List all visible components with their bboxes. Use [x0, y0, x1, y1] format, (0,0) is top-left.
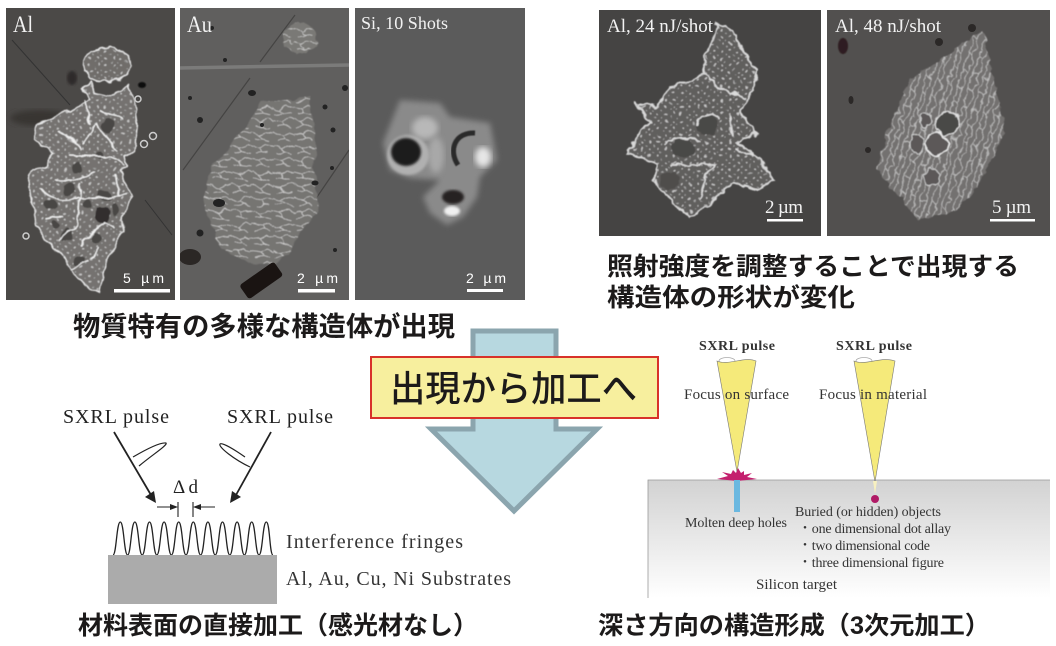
caption: top left: 物質特有の多様な構造体が出現 — [73, 311, 455, 342]
caption: top right: 照射強度を調整することで出現する — [607, 253, 1019, 281]
beam: surface focus — [717, 358, 756, 472]
label: fringes: Interference fringes — [286, 531, 463, 553]
scale bar — [990, 200, 1035, 222]
label: Al, 48 nJ/shot — [835, 16, 942, 37]
label: SXRL pulse right: SXRL pulse — [227, 406, 333, 428]
scale bar — [114, 274, 170, 292]
labels: Focus on surface — [684, 387, 789, 403]
scale bar: 2 µm — [765, 197, 803, 218]
scale bar — [298, 274, 338, 292]
diagram: interference processing — [63, 406, 511, 604]
buried dot — [871, 495, 879, 503]
scale bar — [466, 274, 506, 292]
labels: SXRL pulse — [699, 339, 775, 354]
top crater blob — [84, 48, 130, 82]
labels: Focus in material — [819, 387, 927, 403]
main melted area — [28, 84, 138, 292]
caption: bottom right: 深さ方向の構造形成（3次元加工） — [598, 612, 990, 640]
label: Au — [187, 12, 212, 37]
delta d dimension — [157, 477, 215, 517]
caption: top right: 構造体の形状が変化 — [607, 283, 855, 312]
label: Si, 10 Shots — [361, 13, 448, 33]
molten hole — [734, 480, 740, 512]
beam: in-material focus — [854, 358, 895, 494]
diagram: focus depth processing — [648, 339, 1050, 598]
labels: ・two dimensional code — [798, 539, 930, 554]
callout: from emergence to processing: 出現から加工へ — [390, 368, 637, 409]
scale bar: 5 µm — [992, 197, 1031, 218]
crater bottom — [442, 190, 464, 204]
label: Al, 24 nJ/shot — [607, 16, 714, 37]
crater right — [453, 133, 475, 165]
big down arrow — [431, 331, 597, 511]
arrow: left pulse — [114, 432, 166, 503]
interference fringes — [113, 522, 273, 555]
labels: Silicon target — [756, 577, 838, 593]
surface burst — [717, 468, 757, 481]
label: Al — [13, 12, 33, 37]
arrow: right pulse — [220, 432, 271, 503]
caption: bottom left: 材料表面の直接加工（感光材なし） — [78, 612, 478, 640]
label: substrates: Al, Au, Cu, Ni Substrates — [286, 568, 511, 590]
photo: Al structure — [6, 8, 175, 300]
silicon target — [648, 480, 1050, 598]
scale bar: 2 µm — [297, 270, 338, 286]
labels: Buried (or hidden) objects — [795, 505, 941, 520]
photo: Al 24 nJ/shot — [599, 10, 821, 236]
photo: Al 48 nJ/shot — [827, 10, 1050, 236]
crater left — [387, 135, 429, 175]
delta d dimension: Δ d — [173, 477, 198, 498]
photo: Au structure — [179, 8, 349, 300]
dark debris — [239, 261, 283, 299]
main area — [203, 97, 320, 267]
callout: from emergence to processing — [371, 357, 658, 418]
small upper structure — [283, 23, 317, 53]
caption: top right — [607, 253, 1019, 312]
label: SXRL pulse left: SXRL pulse — [63, 406, 169, 428]
labels: Molten deep holes — [685, 516, 787, 531]
labels: SXRL pulse — [836, 339, 912, 354]
labels: ・one dimensional dot allay — [798, 522, 951, 537]
labels — [684, 339, 951, 593]
scale bar: 2 µm — [466, 270, 506, 286]
scale bar: 5 µm — [123, 270, 164, 286]
labels: ・three dimensional figure — [798, 556, 944, 571]
photo: Si 10 shots — [355, 8, 525, 300]
substrate — [108, 555, 277, 604]
